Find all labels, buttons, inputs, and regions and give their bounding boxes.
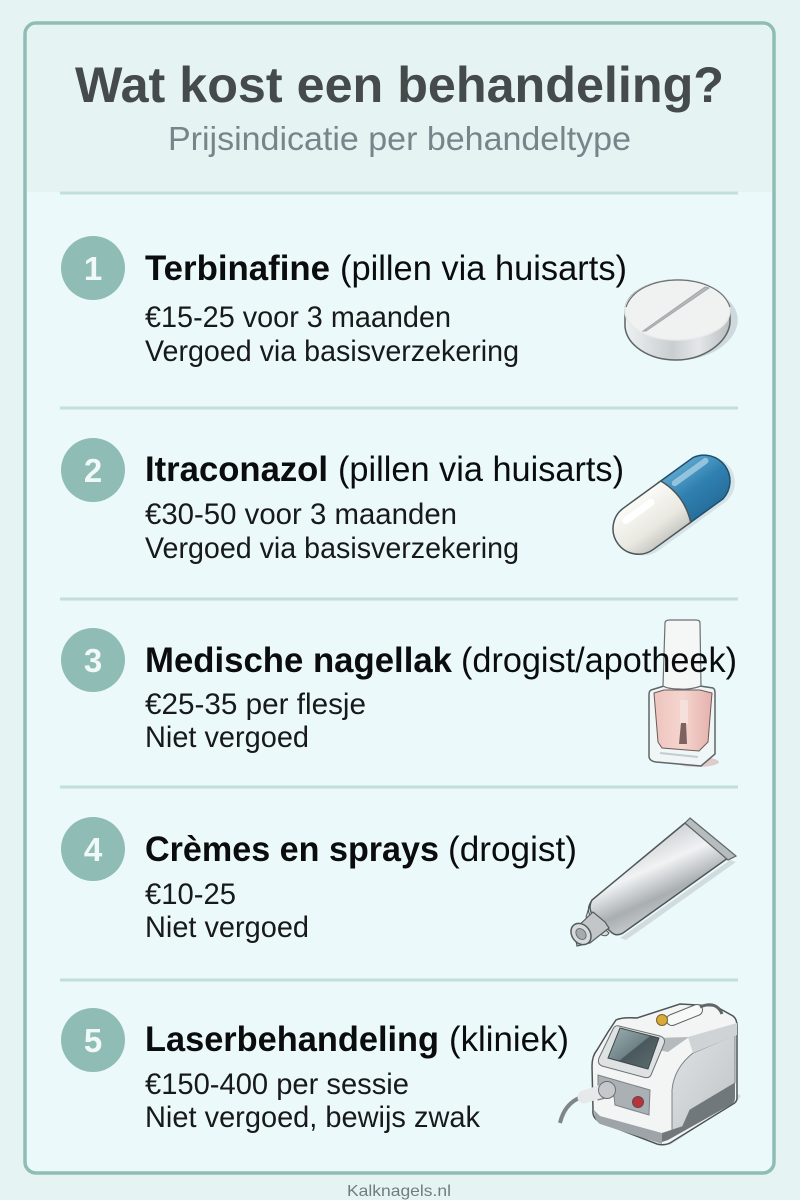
number badge 3: 3 (84, 642, 102, 679)
row 2 reimbursement: Vergoed via basisverzekering (145, 532, 519, 565)
row 4 reimbursement: Niet vergoed (145, 911, 309, 944)
row 1 heading: Terbinafine (145, 248, 330, 288)
subtitle: Prijsindicatie per behandeltype (168, 120, 631, 157)
row 1 reimbursement: Vergoed via basisverzekering (145, 335, 519, 368)
row 3 heading: (drogist/apotheek) (461, 640, 737, 680)
row 2 price: €30-50 voor 3 maanden (145, 498, 457, 531)
row 5 heading: (kliniek) (449, 1019, 569, 1059)
icon: blue and white capsule (603, 443, 745, 568)
row 2: Itraconazol (61, 438, 745, 568)
number badge 1 (61, 236, 125, 300)
row 4 heading: Crèmes en sprays (145, 829, 439, 869)
row 1 price: €15-25 voor 3 maanden (145, 301, 451, 334)
icon: metal ointment tube (567, 818, 736, 949)
row 4 price: €10-25 (145, 878, 236, 911)
icon: nail polish bottle (649, 620, 719, 767)
row 2 heading: Itraconazol (145, 449, 328, 489)
icon: white tablet (625, 280, 742, 367)
number badge 4 (61, 817, 125, 881)
row 5 heading: Laserbehandeling (145, 1019, 439, 1059)
row 5 reimbursement: Niet vergoed, bewijs zwak (145, 1101, 481, 1134)
number badge 5 (61, 1008, 125, 1072)
number badge 3 (61, 628, 125, 692)
row 3: Medische nagellak (61, 620, 737, 767)
row 1 heading: (pillen via huisarts) (340, 248, 627, 288)
number badge 2 (61, 438, 125, 502)
number badge 1: 1 (84, 250, 102, 287)
row 3 price: €25-35 per flesje (145, 688, 366, 721)
row 4: Crèmes en sprays (61, 817, 736, 949)
row 1: Terbinafine (61, 236, 742, 368)
title: Wat kost een behandeling? (75, 56, 724, 113)
row 5 price: €150-400 per sessie (145, 1068, 409, 1101)
header (75, 56, 724, 157)
row 4 heading: (drogist) (448, 829, 577, 869)
number badge 4: 4 (84, 831, 103, 868)
number badge 5: 5 (84, 1022, 102, 1059)
number badge 2: 2 (84, 452, 102, 489)
icon: laser machine (560, 1004, 741, 1145)
row 2 heading: (pillen via huisarts) (338, 449, 624, 489)
row 5: Laserbehandeling (61, 1004, 741, 1145)
footer: source: Kalknagels.nl (347, 1183, 451, 1200)
row 3 heading: Medische nagellak (145, 640, 452, 680)
row 3 reimbursement: Niet vergoed (145, 721, 309, 754)
